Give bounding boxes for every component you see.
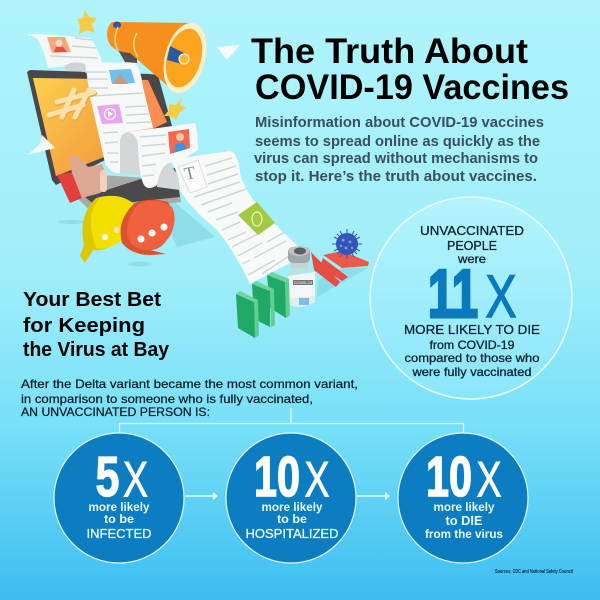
body text: delta variant (21, 377, 358, 419)
icon: portrait card 2 (168, 129, 190, 154)
icon: paper ribbon (28, 34, 302, 284)
callout: 11X more likely to die: PEOPLE (447, 238, 497, 253)
icon: star top (77, 10, 97, 34)
heading: your best bet: for Keeping (23, 315, 145, 337)
stat circle: 10X hospitalized: more likely (262, 500, 323, 514)
stat circle: 5X infected: INFECTED (86, 526, 152, 541)
icon: green dominoes (236, 272, 290, 338)
icon: virus (332, 229, 362, 259)
stat circle: 5X infected: more likely (88, 500, 150, 514)
icon: laptop (27, 70, 181, 212)
icon: portrait card 1 (47, 37, 71, 53)
icon: yellow speech bubble (80, 196, 134, 263)
heading: your best bet: Your Best Bet (23, 289, 161, 311)
intro paragraph: virus can spread without mechanisms to (254, 150, 538, 167)
intro paragraph (254, 114, 544, 185)
callout: 11X more likely to die: were (457, 254, 486, 266)
stat circle: 10X die: 10 (426, 445, 472, 509)
callout: 11X more likely to die: were fully vaccinated (411, 365, 532, 379)
callout: 11X more likely to die (370, 197, 572, 399)
intro paragraph: Misinformation about COVID-19 vaccines (255, 114, 544, 131)
stat circle: 10X die (398, 433, 528, 563)
stat circle: 10X die: more likely (434, 500, 495, 514)
icon: letter T card (178, 160, 207, 193)
icon: hashtag (49, 90, 95, 118)
arrow: infected to hospitalized (185, 492, 218, 500)
icon: letter T card: T (182, 162, 197, 184)
icon: green paperclip card (238, 202, 275, 235)
icon: video card (97, 104, 123, 124)
icon: paper plane left (27, 135, 55, 155)
heading: your best bet (23, 289, 170, 361)
illustration: social media feed and laptop (27, 10, 369, 338)
callout: 11X more likely to die: UNVACCINATED (420, 223, 524, 238)
callout: 11X more likely to die: from COVID-19 (430, 338, 515, 352)
stat circle: 10X hospitalized: HOSPITALIZED (246, 526, 338, 541)
body text: delta variant: After the Delta variant became the most common variant, (21, 377, 358, 391)
stat circle: 5X infected: X (123, 452, 148, 508)
icon: landscape photo (109, 69, 135, 84)
stat circle: 5X infected (54, 433, 184, 563)
title (251, 32, 569, 107)
arrow: hospitalized to die (357, 492, 390, 500)
icon: thumbs up (57, 155, 107, 203)
callout: 11X more likely to die: compared to those who (404, 351, 540, 365)
title: The Truth About (251, 32, 528, 71)
shadow under illustration (58, 198, 368, 297)
stat circle: 10X hospitalized (226, 433, 356, 563)
connector lines (120, 408, 464, 433)
icon: red dominoes (311, 251, 369, 287)
intro paragraph: stop it. Here’s the truth about vaccines. (255, 168, 537, 185)
stat circle: 10X die: X (476, 452, 502, 508)
callout: 11X more likely to die: 11 (428, 256, 478, 332)
icon: megaphone (107, 18, 214, 98)
heading: your best bet: the Virus at Bay (23, 339, 170, 361)
title: COVID-19 Vaccines (255, 68, 569, 107)
icon: vaccine vial: COVID-19 (294, 280, 313, 285)
body text: delta variant: AN UNVACCINATED PERSON IS: (21, 405, 210, 419)
icon: paper plane top right (217, 45, 240, 60)
body text: delta variant: in comparison to someone who is fully vaccinated, (21, 392, 313, 406)
icon: red speech bubble (121, 200, 175, 255)
callout: 11X more likely to die: MORE LIKELY TO DIE (404, 322, 540, 337)
stat circle: 10X die: from the virus (425, 527, 503, 541)
callout: 11X more likely to die: X (486, 263, 516, 330)
icon: star lower (164, 98, 186, 120)
stat circle: 5X infected: to be (104, 512, 134, 526)
stat circle: 10X hospitalized: 10 (254, 445, 300, 509)
stat circle: 10X hospitalized: X (304, 452, 330, 508)
icon: vaccine vial (287, 246, 315, 307)
intro paragraph: seems to spread online as quickly as the (255, 133, 540, 150)
stat circle: 5X infected: 5 (96, 445, 120, 509)
stat circle: 10X hospitalized: to be (277, 512, 307, 526)
stat circle: 10X die: to DIE (446, 513, 483, 528)
